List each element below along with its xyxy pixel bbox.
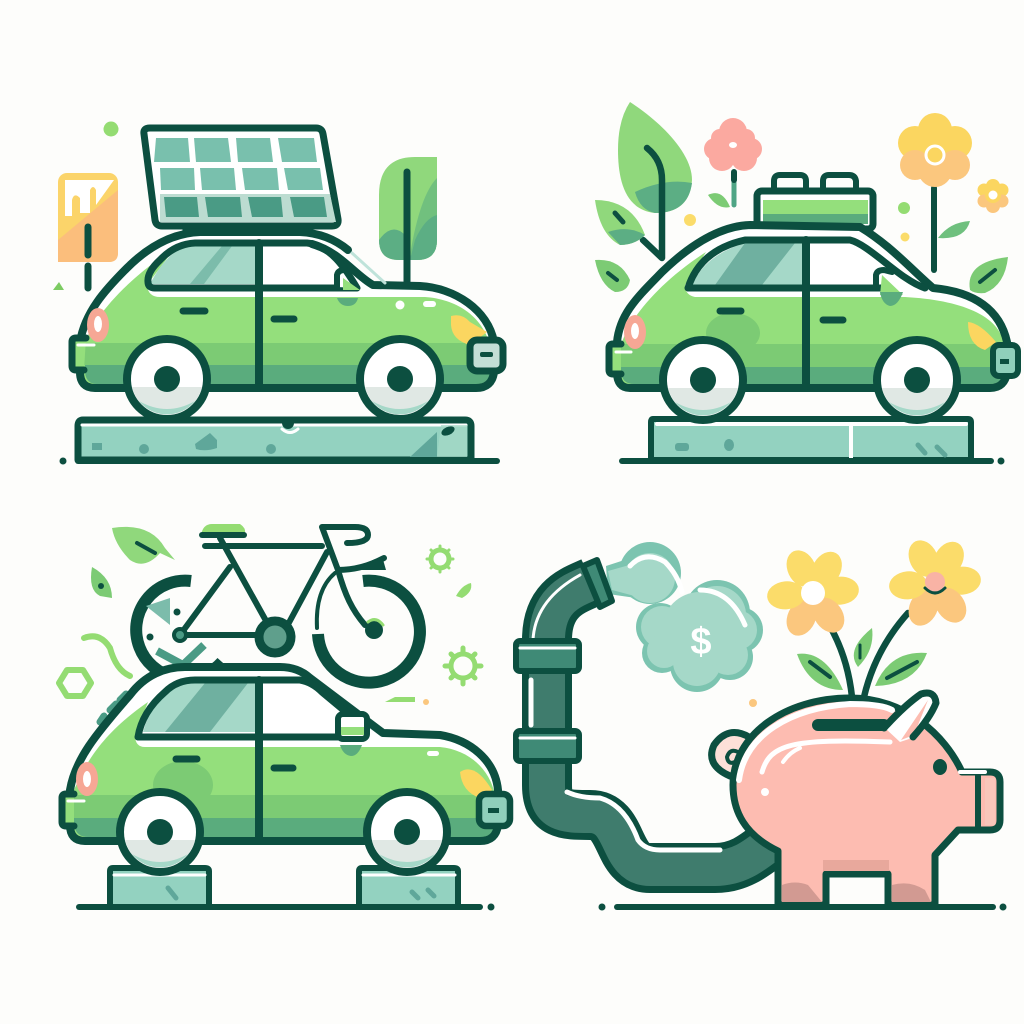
tail light [624,315,646,349]
eye [933,759,947,775]
highlights [396,300,436,310]
ear [885,693,936,742]
windows [688,240,925,386]
headlight [451,315,487,345]
highlights [783,748,800,762]
panel: bicycle car [59,524,510,910]
icon: yellow flower [898,113,972,270]
icon: money cloud [606,542,763,692]
car body [62,667,510,841]
icon: leaves and gears [59,527,494,910]
icon: money cloud: $ [690,621,712,663]
nozzle [583,560,612,607]
windows [138,680,355,840]
door handles [720,311,843,320]
coin slot [818,719,884,731]
panel: exhaust pipe into piggy bank [516,535,1006,910]
wheel blocks [79,868,480,907]
platform [78,417,497,461]
saddle [201,524,245,535]
mirror [337,270,360,306]
mirror [876,270,903,306]
tail light [87,308,109,342]
crank and hub [174,620,383,653]
wheels [663,340,957,420]
panel: solar panel car [53,122,503,464]
bumpers [609,344,1018,376]
icon: bicycle [136,524,420,683]
car body [609,225,1018,388]
car body [72,232,503,388]
tail light [76,762,98,796]
door handles [183,311,294,319]
icon: piggy tail [712,732,749,776]
icon: pink flower [704,118,762,208]
icon: yellow sign [58,173,118,288]
icon: big leaf [618,102,692,258]
bumpers [62,794,510,826]
headlight [968,322,996,350]
icon: dots [684,202,1004,464]
frame [180,527,384,637]
wheels [127,339,440,419]
icon: solar panel [144,128,338,234]
ground line [598,904,1006,910]
front wheel [317,573,420,683]
windows [148,243,357,386]
icon: small leaves [595,200,1008,293]
icon: piggy bank [733,693,1000,905]
icon: roof luggage [757,175,873,229]
icon: tree leaf [379,157,437,285]
icon: dots [53,122,118,464]
door handles [176,759,293,768]
wheels [120,792,447,872]
icon: pipe [516,560,772,868]
icon: small yellow flower [978,179,1008,213]
bumpers [72,338,503,371]
mirror [338,714,367,756]
clamps [516,641,579,761]
platform [622,419,991,461]
icon: flowers and leaves [749,535,982,707]
headlight [460,769,492,798]
panel: roof luggage car with flowers [595,102,1018,464]
rear wheel [136,581,222,679]
